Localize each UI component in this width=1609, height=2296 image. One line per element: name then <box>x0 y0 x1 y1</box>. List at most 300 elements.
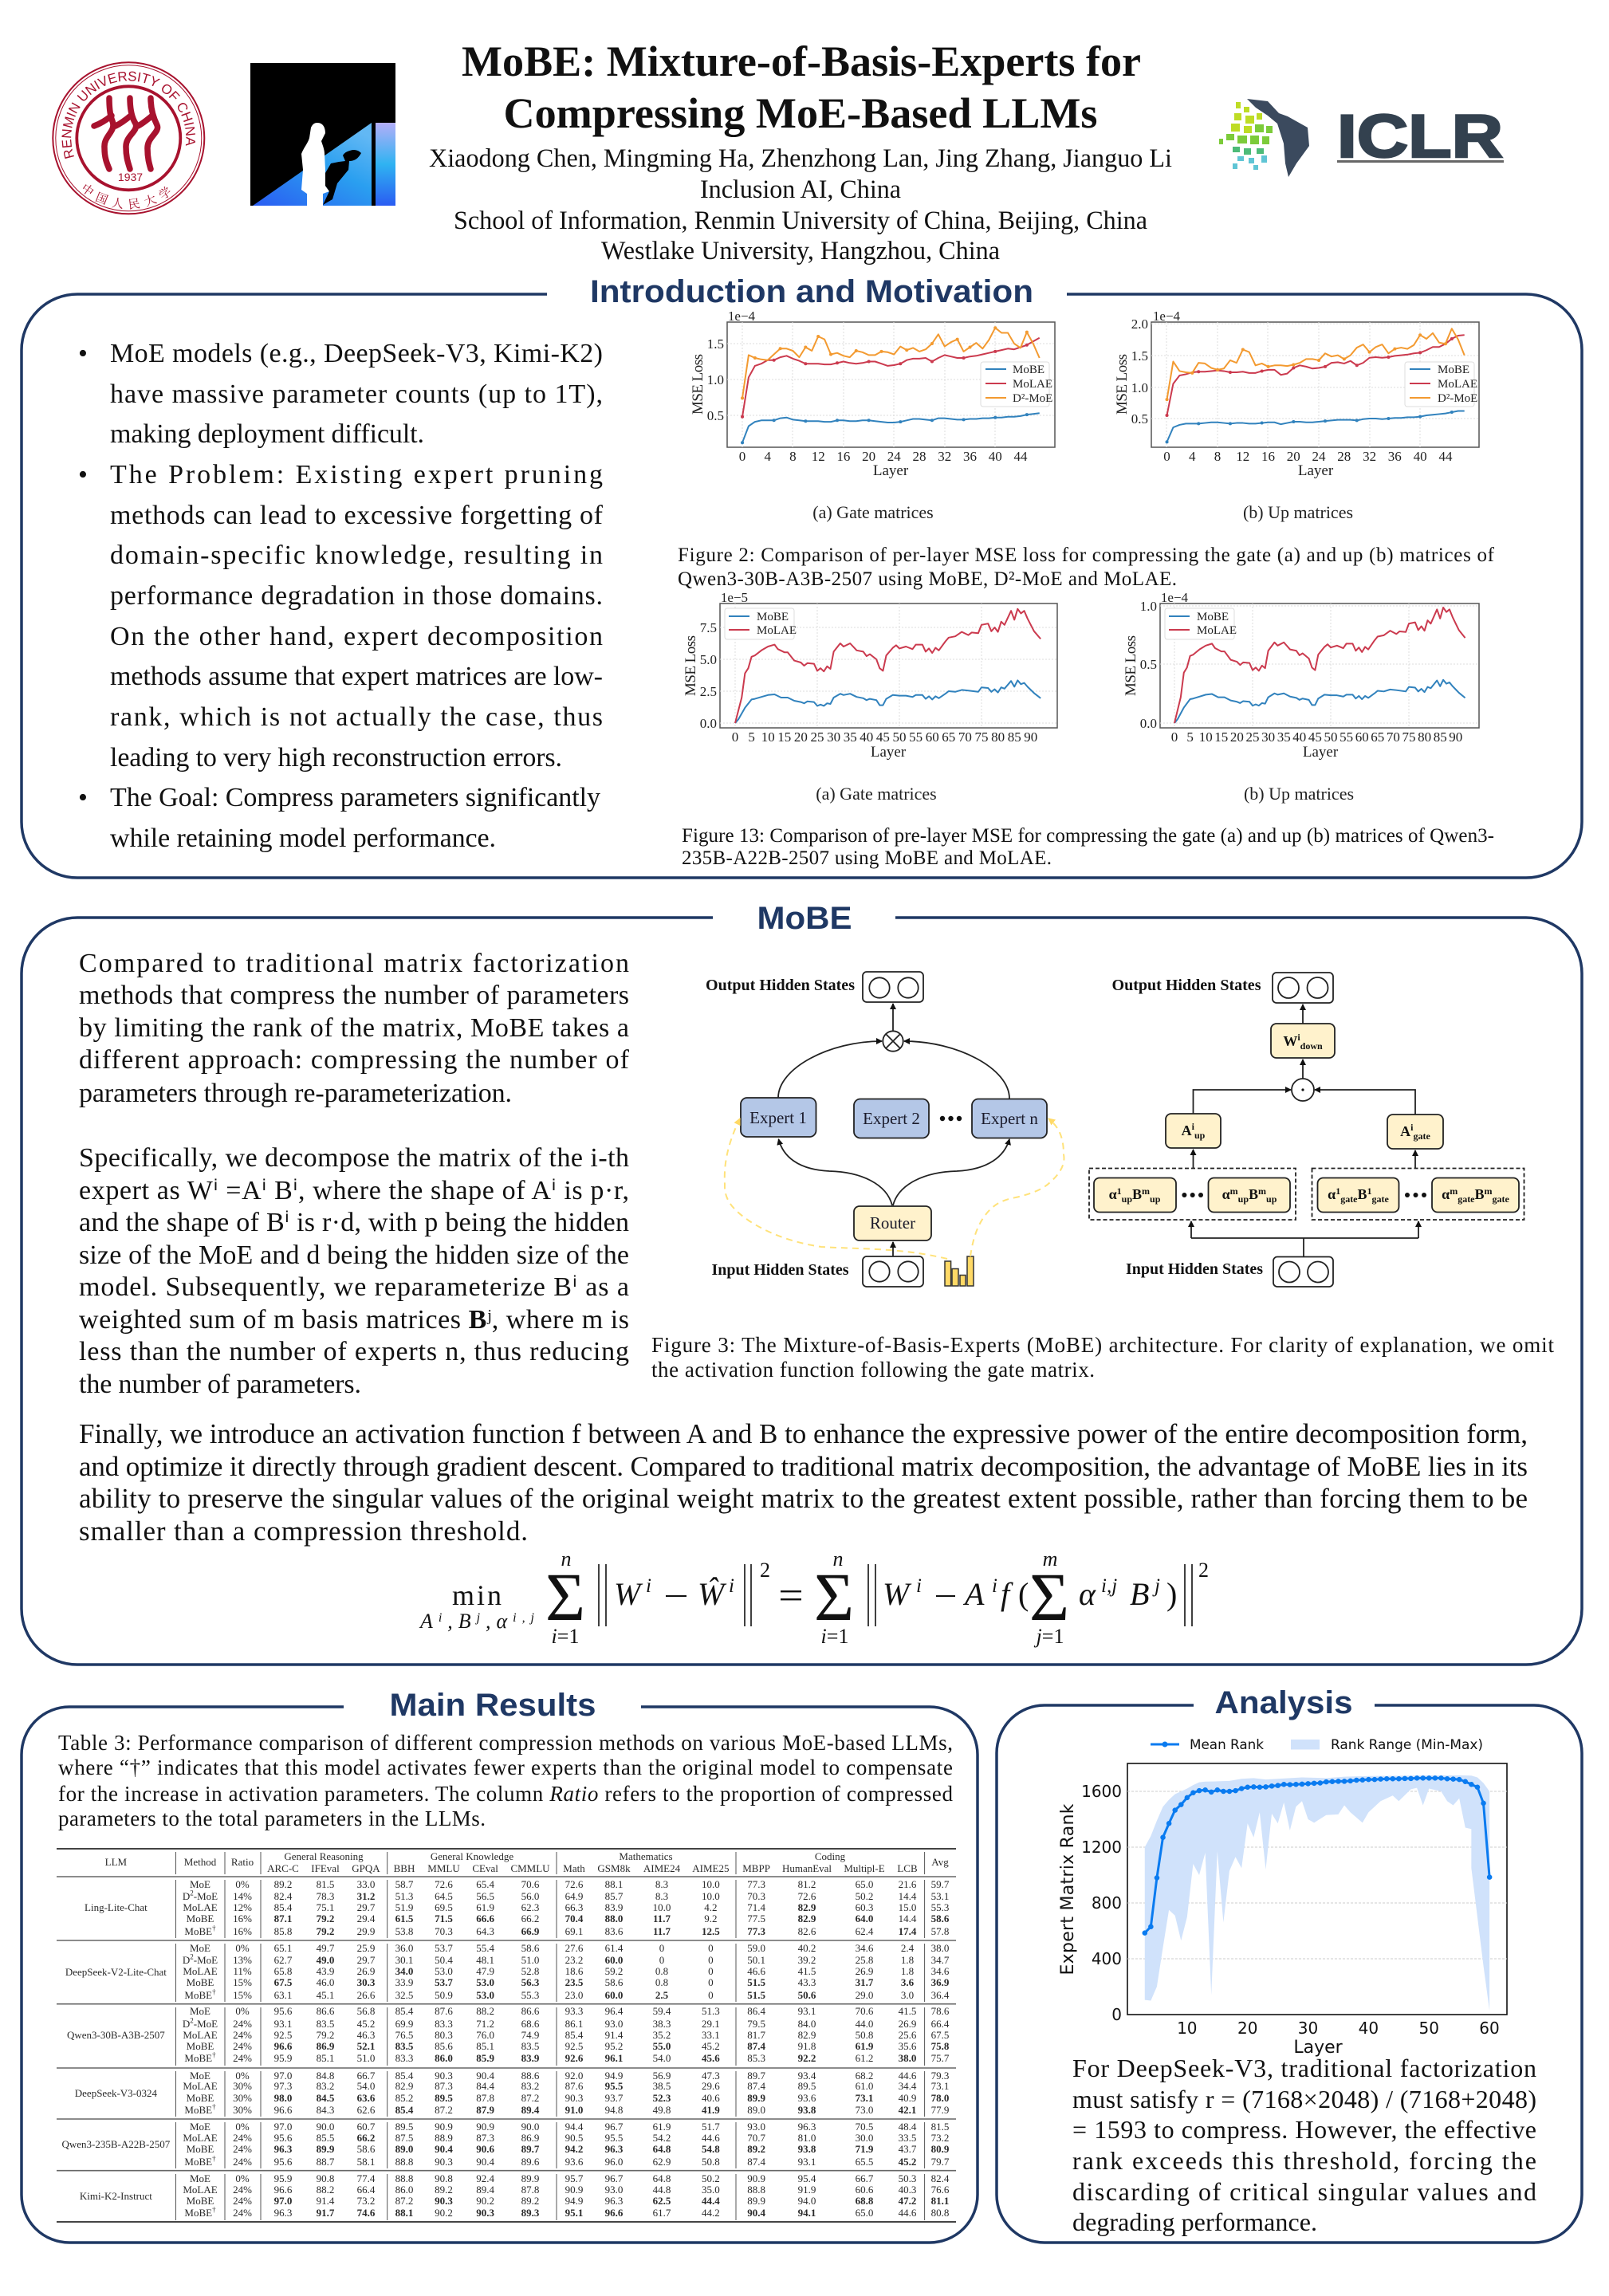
bullet list: methods can lead to excessive forgetting of <box>110 501 604 530</box>
table: performance comparison: 96.1 <box>605 2052 623 2064</box>
table: performance comparison: 14.4 <box>899 1913 916 1924</box>
text block: approach description <box>79 949 630 1399</box>
table: performance comparison: 72.6 <box>435 1878 453 1890</box>
table: performance comparison: 17.4 <box>899 1925 916 1937</box>
table: performance comparison: 11.7 <box>653 1925 671 1937</box>
table: performance comparison: 88.8 <box>395 2172 413 2184</box>
table: performance comparison: 90.6 <box>476 2143 494 2155</box>
table: performance comparison: 92.4 <box>476 2172 494 2184</box>
table: performance comparison: 38.5 <box>653 2080 671 2092</box>
table: performance comparison: 61.9 <box>653 2121 671 2133</box>
table: performance comparison: 45.6 <box>702 2052 720 2064</box>
table: performance comparison: LCB <box>897 1862 918 1874</box>
table: performance comparison: 0.8 <box>655 1965 668 1977</box>
table: performance comparison: 80.8 <box>931 2207 949 2219</box>
table: performance comparison: 75.8 <box>931 2040 949 2052</box>
table: performance comparison: 96.6 <box>605 2207 623 2219</box>
table: performance comparison: 90.3 <box>435 2195 453 2207</box>
table: performance comparison: 70.3 <box>747 1890 765 1902</box>
table: performance comparison: 26.6 <box>357 1989 375 2001</box>
table: performance comparison: 43.7 <box>899 2143 916 2155</box>
diagram: MoBE factorized expert: gate <box>1372 1193 1390 1205</box>
text block: approach description: methods that compress the number of parameters <box>79 981 629 1010</box>
table: performance comparison: 42.1 <box>899 2104 916 2116</box>
equation: objective: A <box>962 1576 985 1612</box>
table: performance comparison: 90.9 <box>435 2121 453 2133</box>
table: performance comparison: 96.7 <box>605 2172 623 2184</box>
table: performance comparison: 90.9 <box>565 2184 583 2196</box>
table: performance comparison: 73.0 <box>856 2104 873 2116</box>
chart: figure 13b up matrices: 20 <box>1230 729 1244 745</box>
table: performance comparison: 35.2 <box>653 2029 671 2041</box>
table: performance comparison: 68.2 <box>856 2070 873 2082</box>
table: performance comparison: 86.6 <box>521 2005 539 2017</box>
table: performance comparison: 45.2 <box>899 2156 916 2168</box>
table: performance comparison: 53.8 <box>395 1925 413 1937</box>
chart: figure 2a gate matrices: 44 <box>1014 449 1028 464</box>
table: performance comparison: 45.2 <box>357 2018 375 2030</box>
table: performance comparison: MoE <box>190 2121 210 2133</box>
chart: figure 13b up matrices: 15 <box>1214 729 1228 745</box>
table: performance comparison: 41.5 <box>899 2005 916 2017</box>
text block: approach description: different approach: compressing the number of <box>79 1045 630 1075</box>
chart: expert matrix rank by layer: 60 <box>1479 2019 1500 2038</box>
chart: figure 13b up matrices: 1e−4 <box>1161 590 1189 605</box>
table: performance comparison: 90.5 <box>565 2132 583 2144</box>
table: performance comparison: 93.1 <box>274 2018 292 2030</box>
table: performance comparison: IFEval <box>311 1862 340 1874</box>
table: performance comparison: 30% <box>233 2104 252 2116</box>
table: performance comparison: 48.4 <box>899 2121 916 2133</box>
table: performance comparison: 93.8 <box>798 2104 816 2116</box>
chart: figure 2a gate matrices: 1.0 <box>707 372 724 387</box>
bullet list: • <box>78 460 88 489</box>
panel: introduction and motivation <box>22 274 1582 878</box>
table: performance comparison: 24% <box>233 2143 252 2155</box>
table: performance comparison: 58.6 <box>931 1913 949 1924</box>
chart: figure 13a gate matrices: 40 <box>860 729 873 745</box>
text block: approach description: less than the number of experts n, thus reducing <box>79 1337 629 1366</box>
table: performance comparison: 52.1 <box>357 2040 375 2052</box>
table: performance comparison: Coding <box>815 1850 846 1862</box>
table: performance comparison: 0 <box>659 1954 664 1966</box>
table: performance comparison: 88.1 <box>605 1878 623 1890</box>
table: performance comparison: 90.3 <box>435 2070 453 2082</box>
table: performance comparison: 36.4 <box>931 1989 949 2001</box>
equation: objective: i <box>992 1575 997 1597</box>
table: performance comparison: 12% <box>233 1901 252 1913</box>
chart: figure 2b up matrices: 4 <box>1189 449 1196 464</box>
table: performance comparison: 89.6 <box>521 2156 539 2168</box>
table: performance comparison: 89.0 <box>747 2104 765 2116</box>
text block: approach description: by limiting the rank of the matrix, MoBE takes a <box>79 1013 629 1043</box>
table: performance comparison: 81.2 <box>798 1878 816 1890</box>
equation: objective: ,α <box>486 1610 509 1633</box>
text block: approach description: parameters through re-parameterization. <box>79 1079 512 1108</box>
table: performance comparison: MoE <box>190 1942 210 1954</box>
chart: expert matrix rank by layer: Mean Rank <box>1190 1737 1264 1753</box>
table: performance comparison: 87.6 <box>435 2005 453 2017</box>
chart: figure 13a gate matrices: 50 <box>893 729 906 745</box>
table: performance comparison: 87.4 <box>747 2156 765 2168</box>
table: performance comparison: 85.9 <box>476 2052 494 2064</box>
table: performance comparison: 86.0 <box>435 2052 453 2064</box>
table: performance comparison: 0.8 <box>655 1976 668 1988</box>
table: performance comparison: 55.3 <box>931 1901 949 1913</box>
diagram: MoBE factorized expert: 1 <box>1117 1185 1122 1197</box>
chart: figure 13b up matrices: MSE Loss <box>1123 635 1139 696</box>
table: performance comparison: MoE <box>190 1878 210 1890</box>
table: performance comparison: 91.4 <box>605 2029 623 2041</box>
heading: analysis: Analysis <box>1215 1685 1352 1720</box>
table: performance comparison: 89.0 <box>395 2143 413 2155</box>
table: performance comparison: 83.3 <box>395 2052 413 2064</box>
equation: objective: α <box>1079 1576 1096 1612</box>
table: performance comparison: 62.6 <box>357 2104 375 2116</box>
chart: figure 13a gate matrices: MoBE <box>757 611 789 623</box>
logo: Renmin University of China seal: 1937 <box>118 171 143 183</box>
table: performance comparison: 90.9 <box>747 2172 765 2184</box>
table: performance comparison: 66.2 <box>357 2132 375 2144</box>
table: performance comparison: 47.2 <box>899 2195 916 2207</box>
table: performance comparison: 93.7 <box>605 2092 623 2104</box>
title: Compressing MoE-Based LLMs <box>504 89 1097 137</box>
table: performance comparison: 87.9 <box>476 2104 494 2116</box>
caption: figure 3: Figure 3: The Mixture-of-Basis-Experts (MoBE) architecture. For clarity of explanation, we omit <box>651 1333 1554 1357</box>
table: performance comparison: 23.5 <box>565 1976 583 1988</box>
diagram: MoBE factorized expert: A <box>1400 1123 1410 1139</box>
table: performance comparison: 53.0 <box>476 1989 494 2001</box>
table: performance comparison: 75.7 <box>931 2052 949 2064</box>
table: performance comparison: 70.4 <box>565 1913 583 1924</box>
equation: objective: ,B <box>447 1610 471 1633</box>
table: performance comparison: 88.8 <box>747 2184 765 2196</box>
bullet list: leading to very high reconstruction errors. <box>110 743 562 773</box>
text block: analysis note: For DeepSeek-V3, traditional factorization <box>1072 2054 1536 2082</box>
chart: expert matrix rank by layer: 10 <box>1177 2019 1198 2038</box>
text block: analysis note: must satisfy r = (7168×2048) / (7168+2048) <box>1072 2085 1536 2113</box>
table: performance comparison: 83.5 <box>395 2040 413 2052</box>
table: performance comparison: 95.4 <box>798 2172 816 2184</box>
table: performance comparison: 55.3 <box>521 1989 539 2001</box>
chart: figure 13a gate matrices: 0.0 <box>700 716 717 731</box>
table: performance comparison: 89.3 <box>521 2207 539 2219</box>
table: performance comparison: 96.3 <box>274 2207 292 2219</box>
table: performance comparison: 25.9 <box>357 1942 375 1954</box>
panel: main results <box>22 1688 978 2243</box>
chart: figure 2b up matrices: MoLAE <box>1438 378 1477 391</box>
table: performance comparison: 95.9 <box>274 2052 292 2064</box>
table: performance comparison: 55.4 <box>476 1942 494 1954</box>
table: performance comparison: 44.2 <box>702 2207 720 2219</box>
table: performance comparison: 79.7 <box>931 2156 949 2168</box>
table: performance comparison: 62.4 <box>856 1925 873 1937</box>
table: performance comparison: 56.5 <box>476 1890 494 1902</box>
table: performance comparison: 93.0 <box>747 2121 765 2133</box>
table: performance comparison: 88.8 <box>395 2156 413 2168</box>
diagram: MoBE factorized expert: α <box>1442 1186 1450 1202</box>
equation: objective: i <box>729 1575 734 1597</box>
table: performance comparison: 24% <box>233 2132 252 2144</box>
diagram: MoBE factorized expert: down <box>1300 1040 1323 1052</box>
table: performance comparison: 85.6 <box>435 2040 453 2052</box>
diagram: MoBE factorized expert <box>1089 973 1524 1287</box>
table: performance comparison: 90.4 <box>747 2207 765 2219</box>
table: performance comparison: 38.0 <box>899 2052 916 2064</box>
table: performance comparison: 24% <box>233 2029 252 2041</box>
chart: figure 13a gate matrices: Layer <box>871 744 907 761</box>
table: performance comparison: 89.9 <box>521 2172 539 2184</box>
chart: expert matrix rank by layer <box>1058 1737 1507 2058</box>
equation: objective: i,j <box>513 1611 535 1625</box>
table: performance comparison: 89.2 <box>747 2143 765 2155</box>
table: performance comparison: 46.3 <box>357 2029 375 2041</box>
table: performance comparison: CEval <box>472 1862 498 1874</box>
table: performance comparison: DeepSeek-V3-0324 <box>75 2087 158 2099</box>
diagram: MoBE factorized expert: m <box>1258 1185 1266 1197</box>
table: performance comparison: 88.9 <box>435 2132 453 2144</box>
equation: objective: ) <box>1166 1576 1177 1612</box>
table: performance comparison: 82.4 <box>274 1890 292 1902</box>
table: performance comparison: 64.8 <box>653 2143 671 2155</box>
table: performance comparison: 51.3 <box>395 1890 413 1902</box>
diagram: MoBE factorized expert: Output Hidden States <box>1111 977 1261 994</box>
table: performance comparison: 58.6 <box>605 1976 623 1988</box>
table: performance comparison: AIME24 <box>643 1862 681 1874</box>
table: performance comparison: 15% <box>233 1989 252 2001</box>
table: performance comparison: 96.3 <box>605 2195 623 2207</box>
table: performance comparison: 68.6 <box>521 2018 539 2030</box>
text block: activation function: Finally, we introduce an activation function f between A and B to enhance the expressive power of the entire decomposition form, <box>79 1418 1528 1449</box>
table: performance comparison: 85.7 <box>605 1890 623 1902</box>
table: performance comparison: 91.0 <box>565 2104 583 2116</box>
chart: figure 13a gate matrices: 7.5 <box>700 620 717 635</box>
caption: table 3: parameters to the total parameters in the LLMs. <box>58 1807 486 1830</box>
table: performance comparison: 55.0 <box>653 2040 671 2052</box>
table: performance comparison: 86.9 <box>317 2040 334 2052</box>
table: performance comparison: 67.5 <box>274 1976 292 1988</box>
table: performance comparison: 60.0 <box>605 1989 623 2001</box>
table: performance comparison: 34.6 <box>856 1942 873 1954</box>
chart: figure 13a gate matrices: MSE Loss <box>683 635 699 696</box>
chart: figure 13b up matrices: 65 <box>1371 729 1384 745</box>
table: performance comparison: 16% <box>233 1925 252 1937</box>
chart: figure 13a gate matrices: 0 <box>732 729 738 745</box>
table: performance comparison: 61.7 <box>653 2207 671 2219</box>
text block: analysis note: discarding of critical singular values and <box>1072 2177 1536 2206</box>
table: performance comparison: 94.8 <box>605 2104 623 2116</box>
table: performance comparison: 62.5 <box>653 2195 671 2207</box>
table: performance comparison: 0% <box>235 2172 250 2184</box>
equation: objective: Σ <box>545 1559 585 1635</box>
table: performance comparison: 58.6 <box>357 2143 375 2155</box>
equation: objective: n <box>561 1547 571 1571</box>
chart: figure 2a gate matrices: 8 <box>789 449 797 464</box>
table: performance comparison: 14% <box>233 1890 252 1902</box>
table: performance comparison: 18.6 <box>565 1965 583 1977</box>
table: performance comparison: 87.6 <box>565 2080 583 2092</box>
table: performance comparison: 15% <box>233 1976 252 1988</box>
table: performance comparison: 78.3 <box>317 1890 334 1902</box>
table: performance comparison: 82.9 <box>395 2080 413 2092</box>
table: performance comparison: 76.6 <box>931 2184 949 2196</box>
table: performance comparison: 2.4 <box>901 1942 914 1954</box>
bullet list: • <box>78 783 88 812</box>
chart: figure 2b up matrices: 20 <box>1287 449 1300 464</box>
table: performance comparison: Kimi-K2-Instruct <box>80 2190 152 2202</box>
bullet list: domain-specific knowledge, resulting in <box>110 541 603 570</box>
table: performance comparison: 88.7 <box>317 2156 334 2168</box>
bullet list: The Goal: Compress parameters significantly <box>110 783 600 812</box>
table: performance comparison: 85.4 <box>395 2104 413 2116</box>
table: performance comparison: General Reasoning <box>284 1850 364 1862</box>
authors and affiliations: School of Information, Renmin University of China, Beijing, China <box>454 206 1147 235</box>
diagram: MoBE factorized expert: W <box>1283 1033 1297 1049</box>
table: performance comparison: 24% <box>233 2207 252 2219</box>
table: performance comparison: AIME25 <box>692 1862 730 1874</box>
table: performance comparison: 15.0 <box>899 1901 916 1913</box>
table: performance comparison: 92.2 <box>798 2052 816 2064</box>
table: performance comparison: 64.3 <box>476 1925 494 1937</box>
panel: MoBE <box>22 901 1582 1665</box>
table: performance comparison: 83.5 <box>521 2040 539 2052</box>
chart: expert matrix rank by layer: Expert Matrix Rank <box>1058 1803 1078 1976</box>
table: performance comparison: 53.7 <box>435 1976 453 1988</box>
table: performance comparison: 36.0 <box>395 1942 413 1954</box>
logo: black square with silhouettes <box>250 63 395 206</box>
table: performance comparison: 54.2 <box>653 2132 671 2144</box>
table: performance comparison: 85.5 <box>317 2132 334 2144</box>
table: performance comparison: 45.1 <box>317 1989 334 2001</box>
table: performance comparison: 68.8 <box>856 2195 873 2207</box>
logo: ICLR <box>1219 99 1504 177</box>
table: performance comparison: 90.0 <box>317 2121 334 2133</box>
diagram: MoBE factorized expert: B <box>1475 1186 1485 1202</box>
table: performance comparison: 85.1 <box>476 2040 494 2052</box>
chart: figure 2b up matrices: Layer <box>1298 462 1334 479</box>
table: performance comparison: 85.4 <box>395 2070 413 2082</box>
table: performance comparison: 91.7 <box>317 2207 334 2219</box>
table: performance comparison: 25.8 <box>856 1954 873 1966</box>
table: performance comparison: 33.5 <box>899 2132 916 2144</box>
table: performance comparison: 87.4 <box>747 2080 765 2092</box>
diagram: MoBE factorized expert: α <box>1222 1186 1230 1202</box>
chart: figure 13a gate matrices: 90 <box>1024 729 1037 745</box>
table: performance comparison: 34.0 <box>395 1965 413 1977</box>
table: performance comparison: 93.1 <box>798 2005 816 2017</box>
text block: analysis note: degrading performance. <box>1072 2208 1317 2236</box>
chart: figure 2b up matrices: 0 <box>1163 449 1170 464</box>
diagram: Mixture-of-Basis-Experts flow <box>706 972 1064 1287</box>
equation: objective: j <box>1152 1575 1160 1597</box>
table: performance comparison: 0 <box>708 1942 714 1954</box>
table: performance comparison: 77.4 <box>357 2172 375 2184</box>
table: performance comparison: 90.2 <box>435 2207 453 2219</box>
table: performance comparison: 49.0 <box>317 1954 334 1966</box>
table: performance comparison: 95.5 <box>605 2132 623 2144</box>
table: performance comparison: D2-MoE <box>183 1953 218 1966</box>
table: performance comparison: 84.8 <box>317 2070 334 2082</box>
table: performance comparison: 24% <box>233 2195 252 2207</box>
chart: figure 13a gate matrices: 60 <box>926 729 939 745</box>
table: performance comparison: 85.4 <box>565 2029 583 2041</box>
table: performance comparison: 0 <box>708 1965 714 1977</box>
table: performance comparison: 88.1 <box>395 2207 413 2219</box>
table: performance comparison: 10.0 <box>702 1878 720 1890</box>
table: performance comparison: 3.6 <box>901 1976 914 1988</box>
caption: table 3 <box>58 1731 954 1830</box>
equation: objective: ( <box>1018 1576 1029 1612</box>
chart: figure 2a gate matrices <box>690 309 1055 522</box>
table: performance comparison: 26.9 <box>357 1965 375 1977</box>
diagram: MoBE factorized expert: i <box>1410 1122 1414 1133</box>
caption: figure 3: the activation function following the gate matrix. <box>651 1358 1095 1382</box>
chart: figure 13b up matrices: 45 <box>1308 729 1322 745</box>
table: performance comparison: MoBE <box>187 2195 214 2207</box>
table: performance comparison: MoLAE <box>183 2029 218 2041</box>
table: performance comparison: 93.4 <box>798 2070 816 2082</box>
table: performance comparison: 83.2 <box>317 2080 334 2092</box>
table: performance comparison: 87.5 <box>395 2132 413 2144</box>
chart: figure 13b up matrices: (b) Up matrices <box>1244 784 1354 804</box>
table: performance comparison: 50.8 <box>702 2156 720 2168</box>
table: performance comparison: 30.1 <box>395 1954 413 1966</box>
caption: figure 3 <box>651 1333 1554 1382</box>
table: performance comparison: MoE <box>190 2172 210 2184</box>
table: performance comparison: 95.6 <box>274 2132 292 2144</box>
caption: figure 2: Qwen3-30B-A3B-2507 using MoBE, D²-MoE and MoLAE. <box>678 568 1177 590</box>
table: performance comparison: 11% <box>233 1965 252 1977</box>
caption: figure 13: 235B-A22B-2507 using MoBE and MoLAE. <box>682 847 1052 869</box>
diagram: Mixture-of-Basis-Experts flow: Router <box>870 1213 915 1233</box>
chart: figure 2a gate matrices: 1e−4 <box>728 309 756 324</box>
table: performance comparison: 76.0 <box>476 2029 494 2041</box>
table: performance comparison: 77.3 <box>747 1878 765 1890</box>
text block: approach description: expert as Wⁱ =Aⁱ Bⁱ, where the shape of Aⁱ is p·r, <box>79 1176 629 1205</box>
text block: approach description: model. Subsequently, we reparameterize Bⁱ as a <box>79 1272 629 1302</box>
table: performance comparison: 44.6 <box>899 2070 916 2082</box>
table: performance comparison: 29.1 <box>702 2018 720 2030</box>
table: performance comparison: MoBE† <box>184 2206 216 2219</box>
table: performance comparison: 67.5 <box>931 2029 949 2041</box>
table: performance comparison: 43.9 <box>317 1965 334 1977</box>
table: performance comparison: 65.5 <box>856 2156 873 2168</box>
table: performance comparison: 60.6 <box>856 2184 873 2196</box>
diagram: MoBE factorized expert: up <box>1150 1193 1161 1205</box>
table: performance comparison: 56.0 <box>521 1890 539 1902</box>
table: performance comparison: 51.5 <box>747 1976 765 1988</box>
bullet list: rank, which is not actually the case, thus <box>110 702 603 732</box>
table: performance comparison: 94.0 <box>798 2195 816 2207</box>
table: performance comparison: 59.4 <box>653 2005 671 2017</box>
table: performance comparison: 60.0 <box>605 1954 623 1966</box>
chart: figure 13b up matrices: 50 <box>1324 729 1338 745</box>
table: performance comparison: 27.6 <box>565 1942 583 1954</box>
chart: figure 2a gate matrices: MSE Loss <box>690 354 706 415</box>
table: performance comparison: 40.9 <box>899 2092 916 2104</box>
chart: figure 13b up matrices: 60 <box>1355 729 1369 745</box>
table: performance comparison: 89.2 <box>435 2184 453 2196</box>
table: performance comparison: 89.2 <box>274 1878 292 1890</box>
table: performance comparison: 61.0 <box>856 2080 873 2092</box>
table: performance comparison: 0% <box>235 1878 250 1890</box>
table: performance comparison: 71.5 <box>435 1913 453 1924</box>
table: performance comparison: Avg <box>931 1856 949 1868</box>
table: performance comparison: 39.2 <box>798 1954 816 1966</box>
table: performance comparison: 64.5 <box>435 1890 453 1902</box>
table: performance comparison: 89.2 <box>521 2195 539 2207</box>
table: performance comparison: 35.0 <box>702 2184 720 2196</box>
